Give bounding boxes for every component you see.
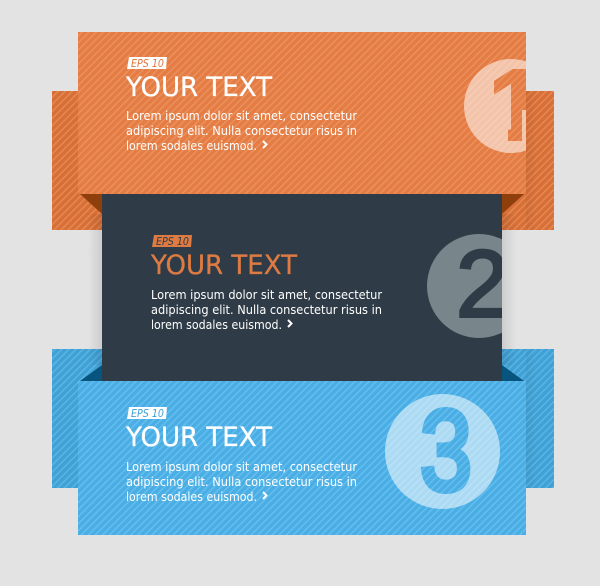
orange back band bbox=[52, 91, 554, 230]
number badge 3 bbox=[385, 388, 500, 515]
tag: EPS 10: EPS 10 bbox=[131, 58, 164, 70]
fold: blue right bbox=[502, 365, 524, 381]
shadows beside dark panel bbox=[88, 91, 536, 488]
heading 1: YOUR TEXT bbox=[125, 72, 273, 103]
body text 2 bbox=[151, 288, 382, 332]
body text 1: adipiscing elit. Nulla consectetur risus in bbox=[126, 124, 357, 138]
panel: step 1 orange bbox=[78, 32, 558, 194]
body text 1 bbox=[126, 109, 357, 153]
blue back band bbox=[52, 349, 554, 488]
tag: EPS 10: EPS 10 bbox=[156, 236, 189, 248]
panel 1 background bbox=[78, 32, 526, 194]
panel 3 background bbox=[78, 381, 526, 535]
number badge 2 bbox=[427, 234, 502, 338]
body text 3: Lorem ipsum dolor sit amet, consectetur bbox=[126, 460, 357, 474]
heading 3: YOUR TEXT bbox=[125, 422, 273, 453]
tag: EPS 10: EPS 10 bbox=[131, 408, 164, 420]
heading 2: YOUR TEXT bbox=[150, 250, 298, 281]
body text 1: Lorem ipsum dolor sit amet, consectetur bbox=[126, 109, 357, 123]
body text 3: adipiscing elit. Nulla consectetur risus in bbox=[126, 475, 357, 489]
number badge 1 bbox=[464, 59, 526, 153]
body text 2: adipiscing elit. Nulla consectetur risus in bbox=[151, 303, 382, 317]
panel: step 3 blue bbox=[78, 381, 526, 535]
body text 1: lorem sodales euismod. bbox=[126, 139, 257, 153]
fold: blue left bbox=[80, 365, 102, 381]
fold: orange left bbox=[80, 194, 102, 214]
panel: step 2 dark bbox=[102, 194, 531, 381]
body text 2: Lorem ipsum dolor sit amet, consectetur bbox=[151, 288, 382, 302]
panel 2 background bbox=[102, 194, 502, 381]
number badge 1: 1 bbox=[488, 48, 545, 163]
number badge 3: 3 bbox=[420, 388, 472, 515]
number badge 2: 2 bbox=[456, 232, 509, 338]
body text 3 bbox=[126, 460, 357, 504]
body text 2: lorem sodales euismod. bbox=[151, 318, 282, 332]
body text 3: lorem sodales euismod. bbox=[126, 490, 257, 504]
fold: orange right bbox=[502, 194, 524, 214]
